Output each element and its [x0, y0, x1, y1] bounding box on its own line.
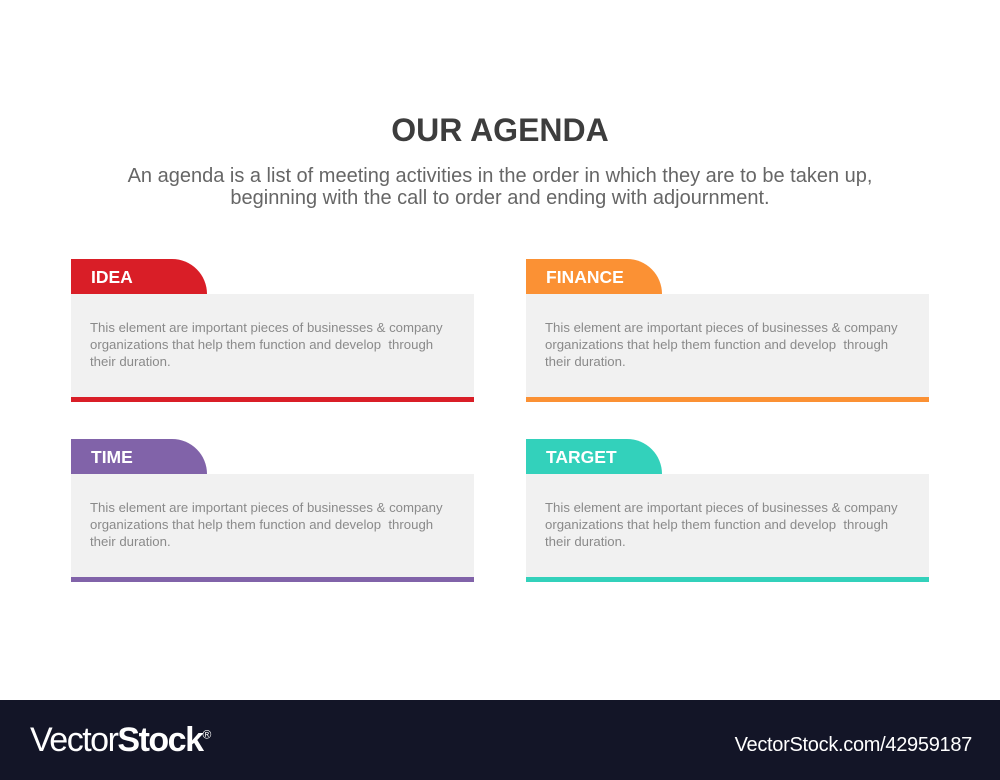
footer id: VectorStock.com/42959187 — [735, 734, 972, 756]
panel: finance — [526, 259, 929, 402]
tab: target — [526, 439, 662, 474]
footer — [0, 700, 1000, 780]
tab: target: TARGET — [546, 447, 617, 467]
tab: time: TIME — [91, 447, 133, 467]
subtitle: An agenda is a list of meeting activities in the order in which they are to be taken up, — [128, 165, 872, 187]
logo: VectorStock® — [30, 721, 210, 759]
tab: time — [71, 439, 207, 474]
subtitle — [128, 165, 872, 209]
panel: idea — [71, 259, 474, 402]
text block: time — [71, 474, 474, 577]
tab: idea: IDEA — [91, 267, 133, 287]
bar: idea — [71, 397, 474, 402]
text block: idea: This element are important pieces of businesses & company organizations that help them function and develop through their duration. — [90, 320, 443, 369]
tab: idea — [71, 259, 207, 294]
text block: finance — [526, 294, 929, 397]
panel: time — [71, 439, 474, 582]
title: OUR AGENDA — [391, 112, 609, 148]
text block: finance: This element are important pieces of businesses & company organizations that help them function and develop through their duration. — [545, 320, 898, 369]
text block: time: This element are important pieces of businesses & company organizations that help them function and develop through their duration. — [90, 500, 443, 549]
text block: target — [526, 474, 929, 577]
text block: idea — [71, 294, 474, 397]
bar: time — [71, 577, 474, 582]
tab: finance: FINANCE — [546, 267, 624, 287]
bar: target — [526, 577, 929, 582]
subtitle: beginning with the call to order and ending with adjournment. — [230, 187, 770, 209]
bar: finance — [526, 397, 929, 402]
text block: target: This element are important pieces of businesses & company organizations that help them function and develop through their duration. — [545, 500, 898, 549]
panel: target — [526, 439, 929, 582]
tab: finance — [526, 259, 662, 294]
